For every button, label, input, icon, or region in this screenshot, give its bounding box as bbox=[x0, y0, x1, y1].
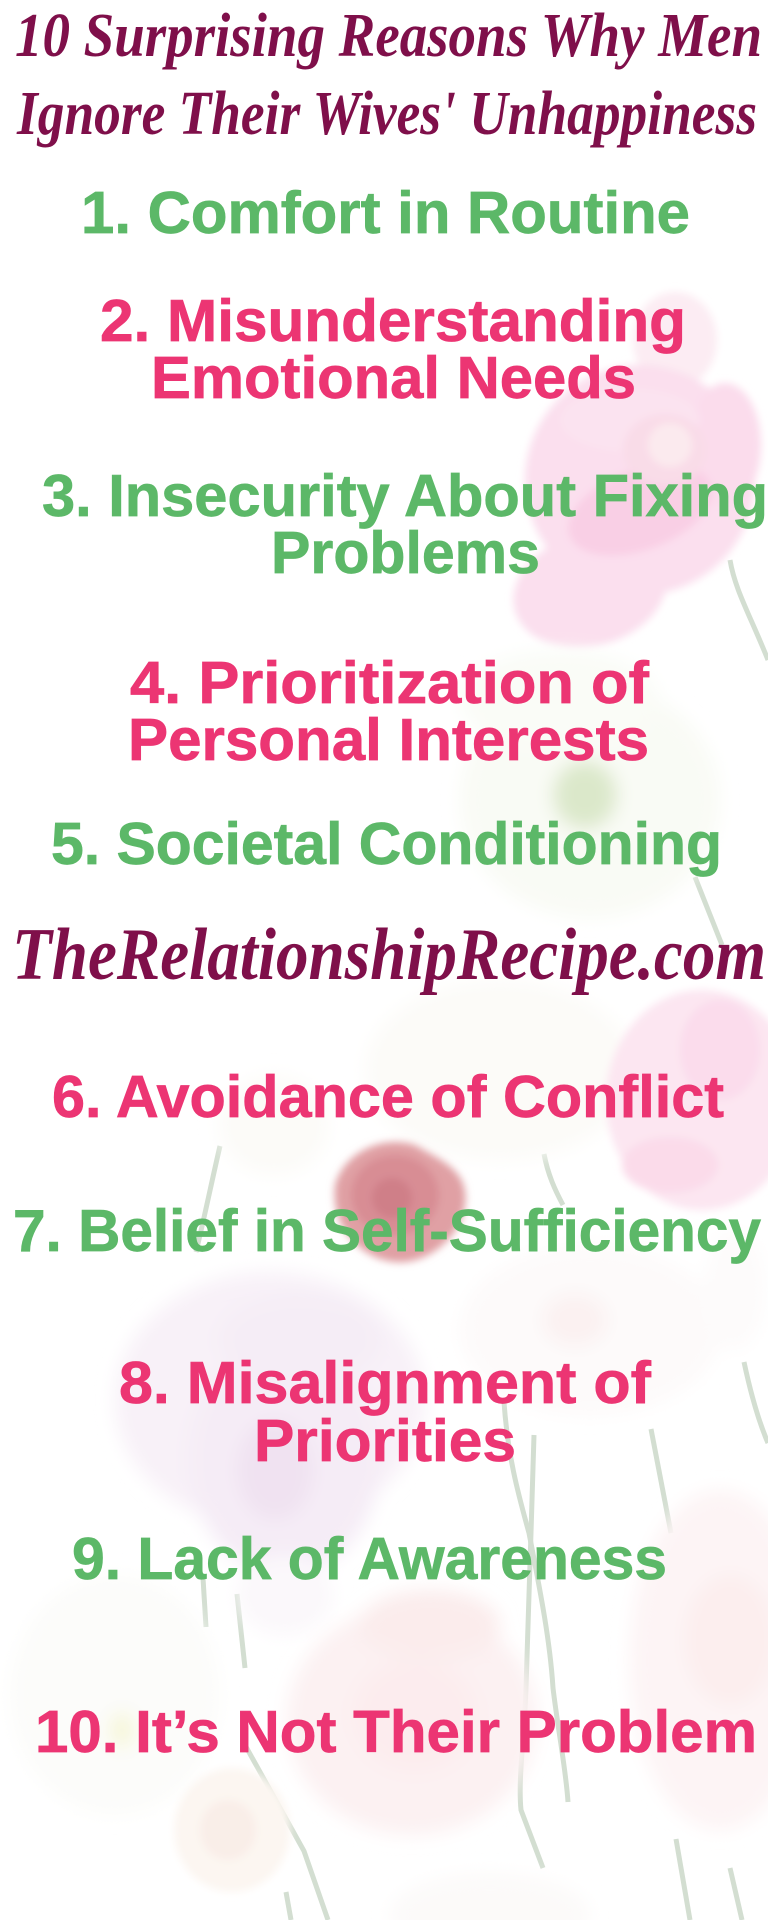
reason 2: Emotional Needs bbox=[151, 345, 636, 411]
reason 3: Problems bbox=[271, 520, 540, 586]
flower: peach rose bbox=[174, 1768, 290, 1892]
stems background bbox=[196, 560, 768, 1920]
flower: small white bbox=[219, 1075, 329, 1175]
flower: red rose bbox=[335, 1142, 466, 1262]
flower: white left bbox=[10, 1575, 220, 1815]
reason 3 bbox=[42, 463, 768, 586]
flower: white top right of lower half bbox=[460, 1230, 765, 1415]
flower: white bottom bbox=[390, 1873, 590, 1920]
reason 5: 5. Societal Conditioning bbox=[51, 811, 722, 877]
title bbox=[15, 2, 762, 148]
reason 4 bbox=[128, 650, 649, 773]
reason 6: 6. Avoidance of Conflict bbox=[52, 1064, 724, 1130]
flower: faint white centre bbox=[365, 980, 635, 1160]
flower: pale pink lower centre bbox=[287, 1590, 537, 1835]
reason 8 bbox=[119, 1350, 651, 1474]
reason 7: 7. Belief in Self-Sufficiency bbox=[13, 1198, 761, 1264]
reason 8: Priorities bbox=[254, 1408, 516, 1474]
reason 1: 1. Comfort in Routine bbox=[81, 180, 690, 246]
flower: pink peony top right bbox=[500, 292, 761, 664]
reason 4: 4. Prioritization of bbox=[130, 650, 649, 716]
flower: pale pink right edge bbox=[630, 1490, 768, 1830]
flower: pink right bbox=[606, 990, 768, 1210]
flower: white and green bbox=[460, 650, 720, 918]
reason 2 bbox=[100, 288, 686, 411]
reason 4: Personal Interests bbox=[128, 707, 649, 773]
reason 2: 2. Misunderstanding bbox=[100, 288, 686, 354]
flower: lilac peony bbox=[115, 1272, 425, 1635]
reason 9: 9. Lack of Awareness bbox=[72, 1526, 667, 1592]
reason 8: 8. Misalignment of bbox=[119, 1350, 651, 1416]
reason 3: 3. Insecurity About Fixing bbox=[42, 463, 768, 529]
reason 10: 10. It’s Not Their Problem bbox=[35, 1699, 757, 1765]
